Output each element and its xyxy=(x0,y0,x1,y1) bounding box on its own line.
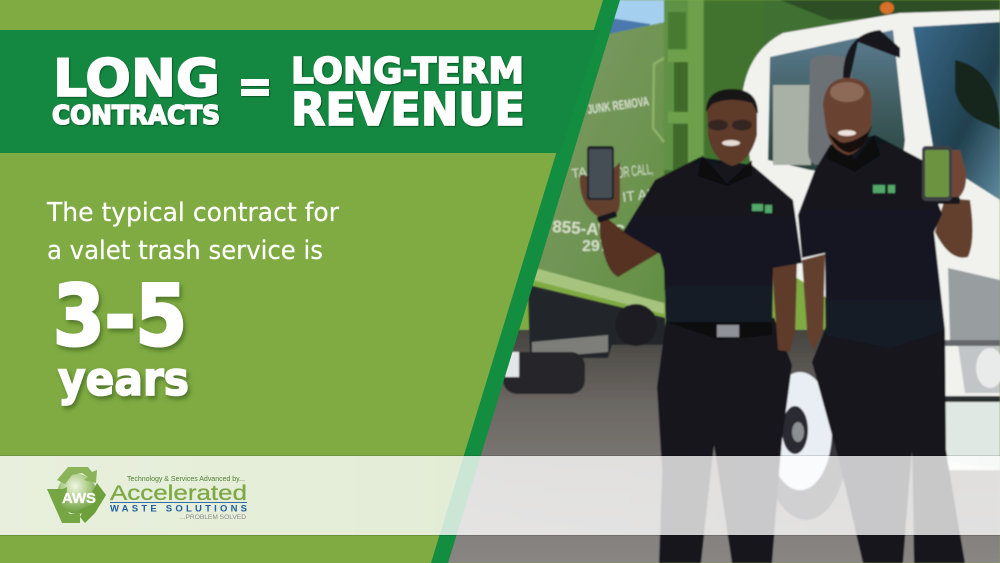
right man trousers xyxy=(812,327,965,563)
tagline: Technology & Services Advanced by... xyxy=(127,474,245,483)
panel: light green left background xyxy=(0,0,610,563)
big stat: 3-5 years: 3-5 xyxy=(53,267,187,365)
wordmark: Waste Solutions: WASTE SOLUTIONS xyxy=(110,504,247,514)
wordmark: Accelerated: Accelerated xyxy=(110,481,247,505)
icon: recycling arrows around sphere xyxy=(47,467,106,523)
text block: typical contract description: a valet trash service is xyxy=(47,236,323,266)
side mirror xyxy=(808,55,852,165)
truck lettering: 297 xyxy=(582,238,609,255)
tagline: problem solved: ...PROBLEM SOLVED xyxy=(180,514,246,521)
left man free arm xyxy=(772,262,797,352)
truck lettering xyxy=(552,93,663,255)
left man smile xyxy=(722,140,740,146)
truck lettering: TAK xyxy=(571,163,597,181)
road surface xyxy=(420,330,1000,563)
truck chassis and rear tyre xyxy=(503,285,665,394)
translucent white footer band xyxy=(0,455,1000,536)
truck box side panel xyxy=(532,0,1000,314)
right man smile xyxy=(838,130,856,136)
left man sunglasses xyxy=(708,120,752,130)
heading word: LONG: LONG xyxy=(53,49,220,109)
left man shirt logo xyxy=(752,204,772,213)
sky and distant roof xyxy=(590,0,680,36)
white truck cab xyxy=(743,10,1000,470)
left man raised arm xyxy=(600,215,660,277)
right man head xyxy=(823,78,872,155)
logo: Accelerated Waste Solutions xyxy=(47,467,247,523)
right man polo shirt xyxy=(798,135,945,348)
man on the left xyxy=(580,89,802,563)
wheel xyxy=(766,372,846,520)
truck lettering: OR CALL, xyxy=(616,161,654,182)
big stat: 3-5 years: years xyxy=(58,352,189,406)
heading word: CONTRACTS: CONTRACTS xyxy=(52,101,220,131)
equals sign xyxy=(241,79,269,96)
door window xyxy=(768,30,905,180)
right man shirt logo xyxy=(873,185,895,193)
truck lettering: JUNK REMOVA xyxy=(586,93,650,117)
text block: typical contract description xyxy=(46,198,339,266)
heading word: LONG-TERM: LONG-TERM xyxy=(291,51,524,92)
left man trousers xyxy=(657,318,792,563)
text block: typical contract description: The typical contract for xyxy=(46,198,339,228)
man on the right xyxy=(798,78,973,563)
phone held by left man xyxy=(587,146,614,200)
left man polo shirt xyxy=(623,157,802,322)
right man raised arm xyxy=(935,198,973,258)
left man head xyxy=(707,90,757,166)
right man free arm xyxy=(802,254,825,350)
photo: two men in front of a green junk removal truck xyxy=(420,0,1000,563)
phone held by right man xyxy=(922,146,952,201)
headlights xyxy=(942,268,1000,402)
truck lettering: 855-AWS xyxy=(552,217,626,241)
heading: long contracts equals long-term revenue xyxy=(52,49,525,136)
left man belt xyxy=(666,312,772,340)
big stat: 3-5 years xyxy=(53,267,189,406)
heading word: REVENUE: REVENUE xyxy=(291,83,525,136)
windshield xyxy=(913,22,1000,200)
truck lettering: IT ALL xyxy=(621,184,663,205)
icon: recycling arrows around sphere: AWS xyxy=(62,490,96,507)
panel: dark green header banner xyxy=(0,30,600,153)
slanted dark green stripe xyxy=(431,0,620,563)
